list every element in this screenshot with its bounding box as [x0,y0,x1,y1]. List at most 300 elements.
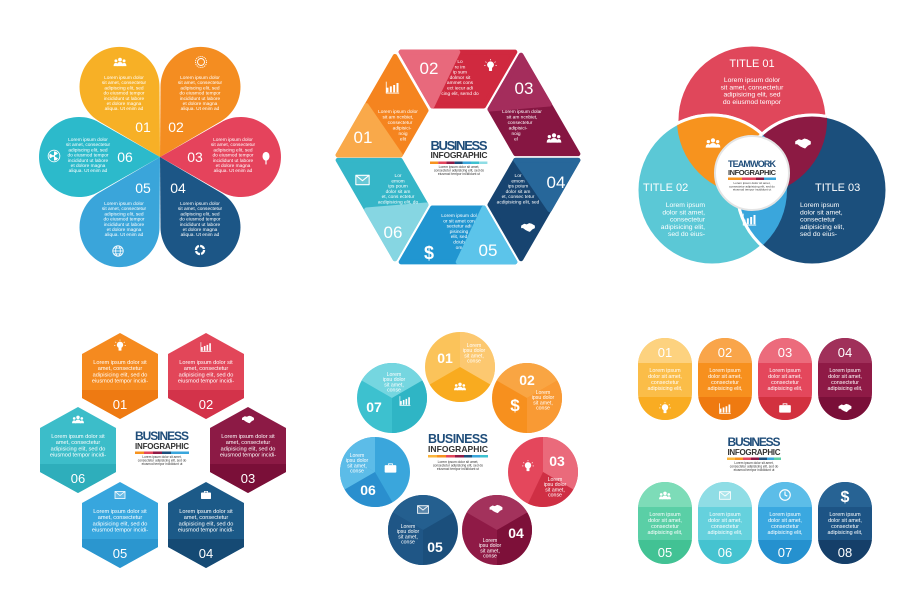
pill 07: Lorem ipsum [769,512,801,518]
segment numbers: 03 [515,79,533,98]
pill 01: consectetur [651,380,679,386]
pill 05: consectetur [651,524,679,530]
segment texts: ammet cons [447,80,474,86]
petal texts: adipiscing elit, sed [180,85,220,91]
circle 04: ipsu dolor [479,543,502,549]
pill 02: consectetur [711,380,739,386]
pill 01: dolor sit amet, [648,374,682,380]
segment texts: dciub [453,240,465,246]
circle 02: ipsu dolor [532,395,555,401]
circle: title 02 [637,115,787,265]
pill 05: Lorem ipsum [649,512,681,518]
segment 04 [490,160,578,259]
petal texts: incididunt ut labore [180,222,220,228]
pill 07 [758,482,812,564]
icon: people [706,138,720,148]
circle 05: ipsu dolor [397,529,420,535]
pill 04: consectetur [831,380,859,386]
panel: pills infographic [638,338,872,564]
circle 05 [388,495,458,565]
petal texts: do eiusmod tempor [67,153,109,159]
segment texts: sectetur adi [447,224,471,230]
hexagon 04: 04 [199,546,213,561]
center title: eiusmod tempor incididunt ut [734,468,774,472]
pill 06: 06 [718,545,732,560]
petal texts: sit amet, consectetur [178,206,223,212]
circle 07: Lorem [387,372,401,378]
petal texts [66,75,256,238]
circle 01: Lorem [467,343,481,349]
petal numbers: 03 [187,149,203,165]
pill 08: Lorem ipsum [829,512,861,518]
circle 04: conse [483,554,497,560]
center title [727,435,781,472]
center title: INFOGRAPHIC [430,150,488,160]
pill 07: adipisicing elit, [767,530,803,536]
circle: title 01 [677,45,827,195]
icon: ring [196,246,204,254]
hexagon 05: adipisicing elit, sed do [93,521,147,527]
hexagon 02: amet, consectetur [184,366,228,372]
circle 04: 04 [508,525,524,541]
icon: globe [113,246,123,256]
petal numbers: 06 [117,149,133,165]
segment texts: acdipisicing elit, sed [497,200,540,206]
pill 03: 03 [778,345,792,360]
pill 08: dolor sit amet, [828,518,862,524]
hexagon 01: Lorem ipsum dolor sit [93,360,147,366]
center title: consectetur adipisicing elit, sed do [729,184,775,188]
circle 02: Lorem [536,390,550,396]
pill 06: consectetur [711,524,739,530]
center title: INFOGRAPHIC [728,448,781,457]
segment texts: Lorem ipsum dol [441,214,477,219]
icon: chart [386,82,399,94]
hexagon 05 [82,482,158,568]
center title: BUSINESS [428,432,488,446]
petal texts: et dolore magna [183,227,218,233]
circle 07 [357,363,427,433]
petal texts: sit amet, consectetur [211,142,256,148]
segment texts: elit [400,136,407,142]
hexagon 03: eiusmod tempor incidi- [220,453,276,459]
circle 03: sit amet, [545,487,565,493]
segment texts: dolmor sit [450,75,471,81]
segment texts: Lo [457,60,463,65]
icon: handshake [795,139,811,148]
overlap: blue [738,134,787,246]
petal 03 [160,117,281,197]
icon: people [547,133,561,143]
petal texts: do eiusmod tempor [103,217,145,223]
title 03 text: Lorem ipsum [800,202,839,209]
pill 04 [818,338,872,420]
circle 04 [462,495,532,565]
segment texts: adipisici- [509,126,528,132]
pill 08: 08 [838,545,852,560]
segment texts: noig [398,131,408,137]
title 02 text: adipisicing elit, [661,224,705,231]
pill 03: adipisicing elit, [767,386,803,392]
hexagon 04: adipisicing elit, sed do [179,521,233,527]
hexagon 02: eiusmod tempor incidi- [178,379,234,385]
petal numbers [117,119,203,196]
icon: chart [743,214,756,226]
petal texts: Lorem ipsum dolor [104,202,144,207]
petal numbers: 05 [135,180,151,196]
segment texts: noig [511,131,521,137]
hexagon 01: eiusmod tempor incidi- [92,379,148,385]
petal 06 [39,117,160,197]
center title [428,432,488,471]
center title: Lorem ipsum dolor sit amet, [439,165,479,169]
petal texts: aliqua. Ut enim ad [181,106,220,112]
center title: consectetur adipisicing elit, sed do [730,464,778,468]
petal texts: aliqua. Ut enim ad [69,168,108,174]
circle 05: conse [401,540,415,546]
petal numbers: 02 [168,119,184,135]
title 02 text: sed do eius- [668,231,705,238]
title 03 text: dolor sit amet, [800,209,843,216]
petal 02 [125,32,255,177]
hexagon 05: amet, consectetur [98,515,142,521]
petal numbers: 04 [170,180,186,196]
center title: Lorem ipsum dolor sit amet, [733,181,771,185]
circle 07: 07 [366,399,382,415]
title 03 text: adipisicing elit, [800,224,844,231]
circle 01: 01 [437,350,453,366]
circle 01 [425,332,495,402]
circle 04: Lorem [483,538,497,544]
petal texts: sit amet, consectetur [178,80,223,86]
circle 06: sit amet, [347,463,367,469]
panel: teamwork venn infographic [637,45,887,265]
panel: hexagon cells infographic [40,333,286,568]
circle 06: Lorem [350,453,364,459]
center title: INFOGRAPHIC [135,442,189,451]
segment texts: ips poum [388,184,408,190]
title 01 text: Lorem ipsum dolor [724,77,780,84]
hexagon 04: Lorem ipsum dolor sit [179,509,233,515]
segment texts: Lor [515,174,521,179]
pill 01 [638,338,692,420]
hexagon 03 [210,407,286,493]
petal texts: adipiscing elit, sed [213,147,253,153]
petal texts: sit amet, consectetur [66,142,111,148]
petal texts: Lorem ipsum dolor [180,202,220,207]
pill 02: Lorem ipsum [709,368,741,374]
title 01 text: do eiusmod tempor [723,99,782,106]
segment 01 [338,56,426,155]
pill 08: $ [841,489,850,506]
petal texts: do eiusmod tempor [212,153,254,159]
center title: consectetur adipisicing elit, sed do [434,169,484,173]
pill 06: adipisicing elit, [707,530,743,536]
title 02 text: consectetur [670,217,706,224]
segment texts: consectetur [388,120,413,126]
title 01 text [721,58,784,106]
circle 07: conse [387,388,401,394]
panel: circles ring infographic [340,332,578,565]
pill 08: adipisicing elit, [827,530,863,536]
circle 05: Lorem [401,524,415,530]
segment numbers: 01 [354,128,372,147]
petal texts: incididunt ut labore [180,96,220,102]
pill 03: dolor sit amet, [768,374,802,380]
segment texts: consectetur [508,120,533,126]
circle 06: conse [350,469,364,475]
hexagon 05: Lorem ipsum dolor sit [93,509,147,515]
segment 03 [490,55,578,154]
center title: eiusmod tempor incididunt ut [438,172,480,176]
center title: eiusmod tempor incididunt ut [733,188,771,192]
title 02 text: TITLE 02 [643,182,688,194]
petal texts: aliqua. Ut enim ad [105,106,144,112]
circle 02: conse [536,406,550,412]
circle 02 [492,363,562,433]
segment texts: dolor sit am [506,189,530,195]
petal texts: sit amet, consectetur [102,206,147,212]
petal 04 [125,137,255,282]
title 03 text: TITLE 03 [815,182,860,194]
hexagon 01: adipisicing elit, sed do [93,372,147,378]
petal texts: sit amet, consectetur [102,80,147,86]
petal texts: aliqua. Ut enim ad [181,232,220,238]
circle 02: $ [510,396,520,415]
hexagon 06: 06 [71,471,85,486]
segment texts: Lor [395,174,401,179]
icon: radiation [48,150,60,162]
hexagon 03: adipisicing elit, sed do [221,446,275,452]
circle 06: 06 [360,482,376,498]
segment texts: Lorem ipsum dolar [502,110,542,115]
circle: title 03 [737,115,887,265]
segment 02 [401,52,515,106]
pill 04: adipisicing elit, [827,386,863,392]
petal texts: incididunt ut labore [104,222,144,228]
icon: people [114,58,126,66]
segment numbers: 04 [547,173,565,192]
title 02 text: dolor sit amet, [662,209,705,216]
petal texts: et dolore magna [71,163,106,169]
icon: dollar: $ [424,243,434,263]
segment numbers: 05 [479,241,497,260]
hexagon 01: amet, consectetur [98,366,142,372]
pill 03 [758,338,812,420]
segment texts: el [514,136,518,142]
hexagon 02: adipisicing elit, sed do [179,372,233,378]
pill 02 [698,338,752,420]
pill 08: consectetur [831,524,859,530]
segment texts: acdipisicing elit, do [378,200,418,206]
center title [430,138,488,176]
segment numbers: 06 [384,223,402,242]
center title: TEAMWORK [728,159,776,169]
pill 06: Lorem ipsum [709,512,741,518]
petal texts: incididunt ut labore [68,158,108,164]
panel: hexagon triangle infographic [338,52,578,263]
hexagon 03: Lorem ipsum dolor sit [221,434,275,440]
petal texts: do eiusmod tempor [179,91,221,97]
segment numbers: 02 [420,59,438,78]
petal texts: incididunt ut labore [213,158,253,164]
center title: INFOGRAPHIC [428,444,488,454]
hexagon 01 [82,333,158,419]
hexagon 03: amet, consectetur [226,440,270,446]
hexagon 06: adipisicing elit, sed do [51,446,105,452]
segment texts: emom [391,179,405,184]
circle 07: ipsu dolor [383,377,406,383]
segment texts: ip sum [453,70,467,76]
circle 01: conse [467,359,481,365]
center title: Lorem ipsum dolor sit amet, [142,455,182,459]
circle 05: 05 [427,539,443,555]
hexagon 03: 03 [241,471,255,486]
pill 01: adipisicing elit, [647,386,683,392]
icon: tree [262,152,270,164]
icon: bulb [484,59,497,71]
petal texts: aliqua. Ut enim ad [105,232,144,238]
icon: handshake [521,223,535,232]
title 01 text: adipisicing elit, sed [723,92,781,99]
pill 08 [818,482,872,564]
pill 05: adipisicing elit, [647,530,683,536]
pill 07: dolor sit amet, [768,518,802,524]
center title: BUSINESS [430,138,488,153]
hexagon 05: eiusmod tempor incidi- [92,528,148,534]
petal numbers: 01 [135,119,151,135]
center title: BUSINESS [728,435,780,449]
segment texts: emom [511,179,525,184]
title 02 text: Lorem ipsum [666,202,705,209]
title 01 text: sit amet, consectetur [721,84,784,91]
title 03 text: sed do eius- [800,231,837,238]
petal texts: Lorem ipsum dolor [68,138,108,143]
circle 03 [508,437,578,507]
petal 01 [65,32,195,177]
pill 05: 05 [658,545,672,560]
segment texts: dolor sit am [386,189,410,195]
petal texts: aliqua. Ut enim ad [214,168,253,174]
petal texts: adipiscing elit, sed [104,85,144,91]
segment texts: ips poium [508,184,528,190]
segment texts: or sit amet con [443,218,475,224]
center title: eiusmod tempor incididunt ut [142,462,182,466]
center title: Lorem ipsum dolor sit amet, [438,460,478,464]
hexagon 05: 05 [113,546,127,561]
circle 03: conse [548,493,562,499]
segment texts: sit am ncnbiet, [383,114,413,120]
center title: consectetur adipisicing elit, sed do [138,458,186,462]
segment 06 [338,160,426,259]
circle 06: ipsu dolor [346,458,369,464]
segment texts: om [456,246,462,251]
circle 03: 03 [549,453,565,469]
segment texts: et, cons ectetur [382,194,415,200]
segment numbers [354,59,565,260]
segment texts [378,59,542,251]
panel: flower infographic [39,32,281,282]
overlap: orange [677,114,788,186]
petal texts: Lorem ipsum dolor [104,76,144,81]
pill 03: consectetur [771,380,799,386]
petal texts: adipiscing elit, sed [104,211,144,217]
title 01 text: TITLE 01 [729,58,775,70]
petal texts: et dolore magna [107,227,142,233]
title 03 text [800,182,860,238]
center circle [715,136,789,210]
pill 01: 01 [658,345,672,360]
circle 05: sit amet, [398,534,418,540]
petal texts: do eiusmod tempor [103,91,145,97]
hexagon 02: 02 [199,397,213,412]
pill 03: Lorem ipsum [769,368,801,374]
hexagon 04: eiusmod tempor incidi- [178,528,234,534]
petal texts: Lorem ipsum dolor [213,138,253,143]
center title: BUSINESS [135,429,189,443]
title 03 text: consectetur [800,217,836,224]
circle 04: sit amet, [480,548,500,554]
petal texts: adipiscing elit, sed [180,211,220,217]
title 02 text [643,182,706,238]
pill 02: adipisicing elit, [707,386,743,392]
overlap: maroon [758,114,827,186]
circle 03: Lorem [548,477,562,483]
segment texts: pisincing [450,229,469,235]
pill 05: dolor sit amet, [648,518,682,524]
circle 01: ipsu dolor [463,348,486,354]
circle 03: ipsu dolor [544,482,567,488]
icon: envelope [356,175,369,185]
pill 02: dolor sit amet, [708,374,742,380]
hexagon 02 [168,333,244,419]
petal texts: adipiscing elit, sed [68,147,108,153]
circle 02: sit amet, [533,400,553,406]
pill 04: dolor sit amet, [828,374,862,380]
segment texts: sit am ncnbiet, [507,114,537,120]
hexagon 01: 01 [113,397,127,412]
center title: INFOGRAPHIC [728,168,777,177]
segment texts: Lorem ipsum dolor [378,110,418,115]
center title [135,429,189,466]
petal 05 [65,137,195,282]
segment 05 [401,208,515,262]
segment texts: ect iecur adi [447,86,473,92]
pill 07: 07 [778,545,792,560]
circle 06 [340,437,410,507]
petal texts: Lorem ipsum dolor [180,76,220,81]
pill 04: Lorem ipsum [829,368,861,374]
petal texts: et dolore magna [107,101,142,107]
center title: Lorem ipsum dolor sit amet, [734,461,774,465]
segment texts: adipisici- [393,126,412,132]
segment texts: elit, sed [451,234,468,240]
segment texts: et, consec tetur [502,194,535,200]
hexagon 06: eiusmod tempor incidi- [50,453,106,459]
pill 01: Lorem ipsum [649,368,681,374]
petal texts: et dolore magna [216,163,251,169]
center title [728,159,777,192]
icon: sun [195,56,207,68]
petal texts: incididunt ut labore [104,96,144,102]
pill 04: 04 [838,345,852,360]
hexagon 04 [168,482,244,568]
hexagon 06: Lorem ipsum dolor sit [51,434,105,440]
segment texts: re im [455,64,465,70]
hexagon 06: amet, consectetur [56,440,100,446]
pill 02: 02 [718,345,732,360]
circle 01: sit amet, [464,353,484,359]
